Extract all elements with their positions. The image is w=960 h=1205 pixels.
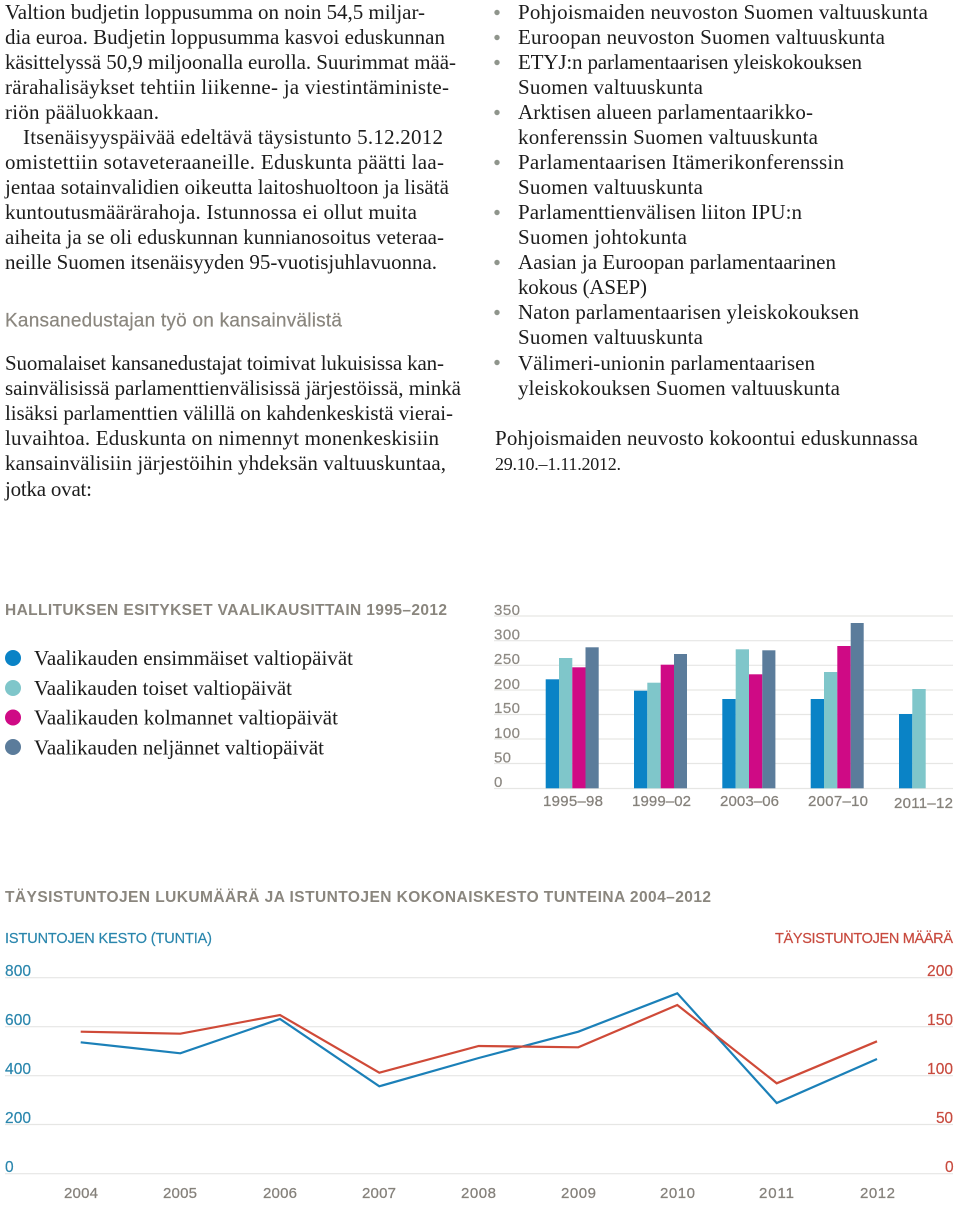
list: nine delegations: Suomen valtuuskunta: [518, 325, 704, 349]
text block: budget and independence session: Itsenäisyyspäivää edeltävä täysistunto 5.12.2012: [23, 125, 443, 149]
bar chart y axis labels: 50: [494, 750, 511, 766]
bar chart x axis labels: 1995–98: [543, 793, 603, 810]
bar chart y axis labels: 100: [494, 725, 520, 742]
year labels: 2012: [860, 1185, 895, 1202]
bar chart y axis labels: 250: [494, 651, 520, 668]
legend: bar chart series: Vaalikauden neljännet valtiopäivät: [34, 736, 324, 760]
bar chart y axis labels: 300: [494, 626, 520, 644]
text block: budget and independence session: Valtion budjetin loppusumma on noin 54,5 miljar-: [5, 0, 425, 24]
legend: bar chart series: Vaalikauden toiset valtiopäivät: [34, 676, 292, 700]
text block: international work: [4, 351, 462, 501]
bars: 1995–98: [546, 647, 599, 788]
bars: 1999–02: [634, 654, 687, 788]
list: nine delegations: kokous (ASEP): [518, 275, 647, 299]
list: nine delegations: Parlamentaarisen Itämerikonferenssin: [518, 150, 844, 174]
text block: budget and independence session: [4, 0, 456, 274]
text block: budget and independence session: omistettiin sotaveteraaneille. Eduskunta päätti laa-: [5, 150, 444, 174]
axis title: number of plenary sessions: TÄYSISTUNTOJEN MÄÄRÄ: [775, 930, 953, 947]
year labels: 2004: [64, 1185, 98, 1202]
legend: bar chart series: [5, 646, 353, 760]
list: nine delegations: Arktisen alueen parlamentaarikko-: [518, 100, 813, 124]
bar chart x axis labels: [543, 793, 953, 812]
year labels: 2010: [660, 1185, 695, 1202]
year labels: [64, 1185, 895, 1202]
right axis labels: 200: [927, 963, 953, 980]
bar chart y axis labels: [494, 602, 520, 791]
list: nine delegations: Parlamenttienvälisen liiton IPU:n: [518, 200, 802, 224]
line chart: duration and number of sessions: [5, 963, 954, 1202]
heading: plenary sessions: TÄYSISTUNTOJEN LUKUMÄÄRÄ JA ISTUNTOJEN KOKONAISKESTO TUNTEINA 2004–2012: [5, 889, 711, 906]
text block: international work: Suomalaiset kansanedustajat toimivat lukuisissa kan-: [5, 351, 444, 375]
text block: Nordic Council meeting: [495, 426, 919, 474]
bars: 2003–06: [722, 649, 775, 788]
text block: international work: luvaihtoa. Eduskunta on nimennyt monenkeskisiin: [5, 426, 440, 450]
text block: budget and independence session: dia euroa. Budjetin loppusumma kasvoi eduskunnan: [5, 25, 446, 49]
text block: budget and independence session: neille Suomen itsenäisyyden 95-vuotisjuhlavuonna.: [5, 250, 437, 274]
text block: budget and independence session: aiheita ja se oli eduskunnan kunnianosoitus veteraa-: [5, 225, 444, 249]
heading: Kansanedustajan työ on kansainvälistä: Kansanedustajan työ on kansainvälistä: [5, 310, 342, 332]
list: nine delegations: Suomen valtuuskunta: [518, 175, 704, 199]
year labels: 2007: [362, 1185, 396, 1202]
bar chart y axis labels: 150: [494, 700, 520, 717]
list: nine delegations: [494, 0, 929, 400]
list: nine delegations: Välimeri-unionin parlamentaarisen: [518, 351, 816, 375]
axis title: session duration: ISTUNTOJEN KESTO (TUNTIA): [5, 931, 212, 947]
list: nine delegations: yleiskokouksen Suomen valtuuskunta: [518, 376, 841, 400]
list: nine delegations: Suomen johtokunta: [518, 225, 688, 249]
legend: bar chart series: Vaalikauden ensimmäiset valtiopäivät: [34, 646, 353, 670]
right axis labels: 100: [927, 1061, 953, 1078]
line: session hours: [81, 993, 877, 1103]
text block: international work: jotka ovat:: [4, 477, 92, 501]
right axis labels: 50: [936, 1110, 953, 1127]
bar chart x axis labels: 1999–02: [632, 793, 691, 810]
left axis labels: 200: [5, 1110, 31, 1127]
year labels: 2005: [163, 1185, 197, 1202]
heading: government proposals: HALLITUKSEN ESITYKSET VAALIKAUSITTAIN 1995–2012: [5, 602, 447, 619]
bars: 2007–10: [811, 623, 864, 788]
text block: budget and independence session: rärahalisäykset tehtiin liikenne- ja viestintäministe-: [5, 75, 449, 99]
list: nine delegations: Suomen valtuuskunta: [518, 75, 704, 99]
list: nine delegations: Pohjoismaiden neuvoston Suomen valtuuskunta: [518, 0, 929, 24]
year labels: 2006: [263, 1185, 297, 1202]
bar chart: proposals by term: [494, 602, 953, 812]
text block: budget and independence session: kuntoutusmäärärahoja. Istunnossa ei ollut muita: [5, 200, 418, 224]
year labels: 2008: [461, 1185, 496, 1202]
year labels: 2009: [561, 1185, 596, 1202]
text block: budget and independence session: käsittelyssä 50,9 miljoonalla eurolla. Suurimmat mää-: [5, 50, 456, 74]
bar chart x axis labels: 2007–10: [808, 793, 868, 810]
list: nine delegations: Aasian ja Euroopan parlamentaarinen: [518, 250, 836, 274]
year labels: 2011: [759, 1185, 794, 1202]
list: nine delegations: Euroopan neuvoston Suomen valtuuskunta: [518, 25, 886, 49]
left axis labels: [5, 963, 31, 1176]
legend: bar chart series: Vaalikauden kolmannet valtiopäivät: [34, 706, 338, 730]
text block: Nordic Council meeting: Pohjoismaiden neuvosto kokoontui eduskunnassa: [495, 426, 919, 450]
line: plenary count: [81, 1005, 877, 1083]
left axis labels: 400: [5, 1061, 31, 1078]
right axis labels: [927, 963, 954, 1176]
list: nine delegations: ETYJ:n parlamentaarisen yleiskokouksen: [518, 50, 862, 74]
text block: international work: lisäksi parlamenttien välillä on kahdenkeskistä vierai-: [5, 401, 453, 425]
text block: international work: kansainvälisiin järjestöihin yhdeksän valtuuskuntaa,: [5, 451, 446, 475]
right axis labels: 150: [927, 1012, 953, 1029]
left axis labels: 600: [5, 1012, 31, 1029]
bar chart y axis labels: 200: [494, 676, 520, 693]
text block: Nordic Council meeting: 29.10.–1.11.2012.: [495, 454, 621, 474]
text block: budget and independence session: jentaa sotainvalidien oikeutta laitoshuoltoon ja lisätä: [4, 175, 450, 199]
left axis labels: 0: [5, 1159, 14, 1176]
text block: budget and independence session: riön pääluokkaan.: [5, 100, 159, 124]
bar chart x axis labels: 2003–06: [720, 793, 779, 810]
bar chart y axis labels: 350: [494, 602, 520, 619]
bars: 2011–12: [899, 689, 926, 788]
right axis labels: 0: [945, 1159, 954, 1176]
list: nine delegations: konferenssin Suomen valtuuskunta: [518, 125, 819, 149]
bar chart x axis labels: 2011–12: [894, 795, 953, 812]
left axis labels: 800: [5, 963, 31, 980]
list: nine delegations: Naton parlamentaarisen yleiskokouksen: [518, 300, 860, 324]
text block: international work: sainvälisissä parlamenttienvälisissä järjestöissä, minkä: [5, 376, 462, 400]
bar chart y axis labels: 0: [494, 774, 502, 791]
